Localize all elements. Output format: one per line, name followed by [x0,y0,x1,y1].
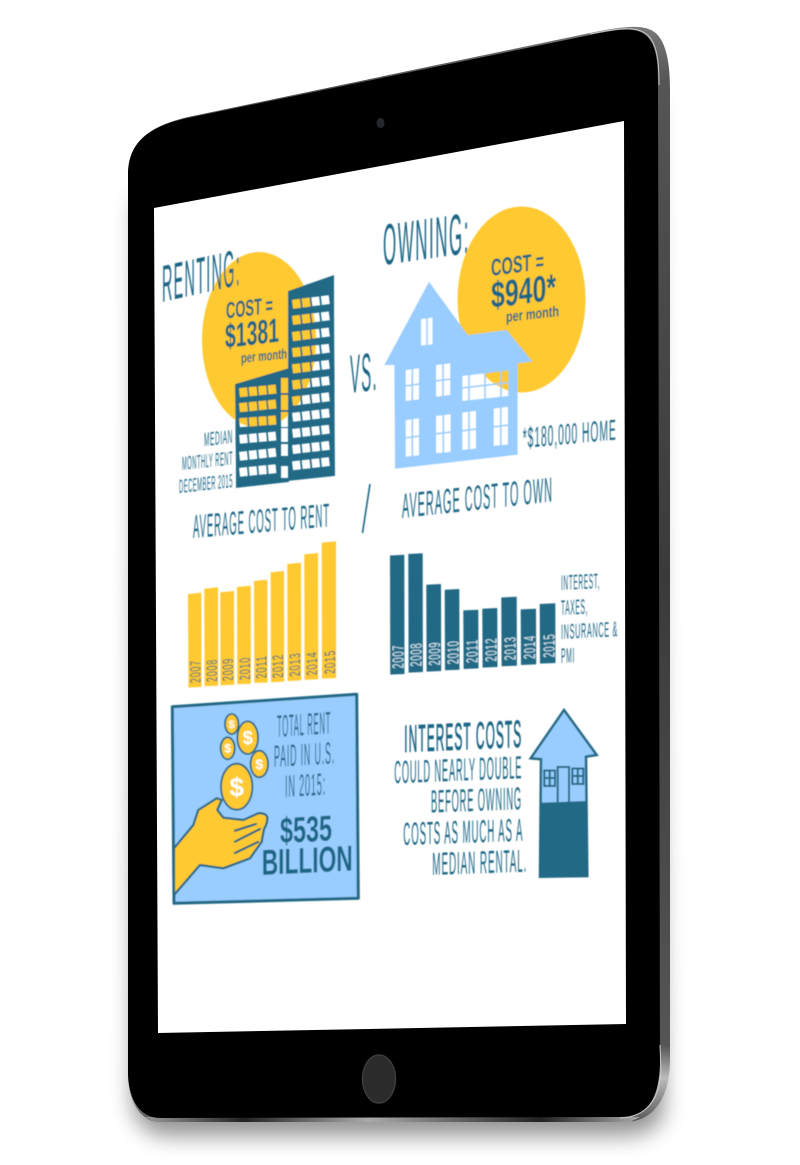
year labels: own: 2015 [541,633,558,658]
year labels: own: 2009 [427,641,444,666]
panel: owning [383,201,617,469]
year labels: own: 2014 [522,634,539,659]
infographic content: MEDIAN RENTAL. [432,843,527,882]
dollar signs on coins: $ [255,756,263,772]
screen [154,121,626,1033]
tablet device [128,27,670,1136]
house icon [384,282,533,469]
year labels: own: 2012 [483,637,500,662]
yellow circle: renting cost [202,252,316,428]
cost text: renting: $1381 [225,312,279,356]
cost text: owning [491,248,559,326]
infographic content: INTEREST COSTS [404,714,522,761]
infographic content: AVERAGE COST TO RENT [193,497,330,546]
cost text: renting [225,292,287,366]
big number: 535 billion [262,807,353,883]
infographic content: PAID IN U.S. [274,735,335,774]
year labels: rent: 2014 [304,651,321,676]
icon: coins [221,714,268,810]
dollar signs on coins [224,719,263,802]
home button [362,1055,396,1103]
tablet rim [128,27,670,1122]
cost text: renting: COST = [226,292,273,323]
chart note: own costs: PMI [561,644,575,668]
dollar signs on coins: $ [243,728,253,748]
panel: owning: OWNING: [383,201,470,278]
dollar signs on coins: $ [229,772,244,802]
cost text: owning: $940* [491,266,556,316]
infographic content: VS. [350,342,378,405]
panel: renting [162,238,335,498]
text: INTEREST, [561,570,600,595]
infographic content: COSTS AS MUCH AS A [403,812,523,852]
infographic content: BEFORE OWNING [431,780,522,819]
text: total rent paid [274,705,335,804]
panel: renting: MONTHLY RENT [182,448,233,475]
year labels: rent: 2008 [204,658,221,683]
rim highlight [590,29,661,1118]
year labels: rent: 2011 [254,655,270,679]
panel: renting: MEDIAN [204,427,233,451]
camera [376,118,384,128]
divider slash [362,484,370,533]
cost text: renting: per month [241,345,287,366]
tall building icon [288,275,335,481]
cost text: owning: per month [506,303,559,326]
dollar signs on coins: $ [229,719,235,731]
tablet bottom edge [145,1117,640,1122]
dollar signs on coins: $ [224,742,231,756]
year labels: rent: 2007 [188,659,204,684]
big number: 535 billion: $535 [280,807,332,851]
tablet black bezel [128,30,660,1118]
bar chart: rent [188,541,339,688]
year labels: own: 2010 [445,640,462,665]
drop shadow [132,100,664,1136]
panel: total rent paid [172,694,358,903]
panel background [172,694,358,903]
year labels: rent: 2012 [270,653,287,679]
big number: 535 billion: BILLION [262,837,353,883]
text block: interest costs [394,714,527,882]
panel: total rent paid: IN 2015: [285,767,326,804]
cost text: owning: COST = [491,248,544,282]
text: INSURANCE & [561,618,618,644]
year labels: rent: 2009 [220,657,237,682]
chart note: own costs: TAXES, [561,596,588,620]
chart note: own costs [561,570,618,668]
year labels: rent: 2013 [287,652,304,677]
year labels: own: 2008 [409,642,426,667]
infographic content: TOTAL RENT [277,705,331,744]
year labels: rent: 2010 [237,656,254,681]
year labels: own [390,633,558,669]
year labels: own: 2013 [503,636,520,661]
short building icon [235,368,289,488]
panel: renting: RENTING: [162,238,241,314]
note: median monthly rent [179,427,233,498]
infographic content [162,201,618,903]
year labels: own: 2011 [464,638,481,663]
year labels: rent [188,649,339,684]
bar chart: own [390,553,558,675]
year labels: rent: 2015 [322,649,339,675]
icon: hand [174,798,267,895]
year labels: own: 2007 [390,644,407,669]
yellow circle: owning cost [458,206,586,392]
text: *$180,000 HOME [523,415,617,455]
icon: house with interest level [531,710,597,878]
panel: renting: DECEMBER 2015 [179,471,233,498]
